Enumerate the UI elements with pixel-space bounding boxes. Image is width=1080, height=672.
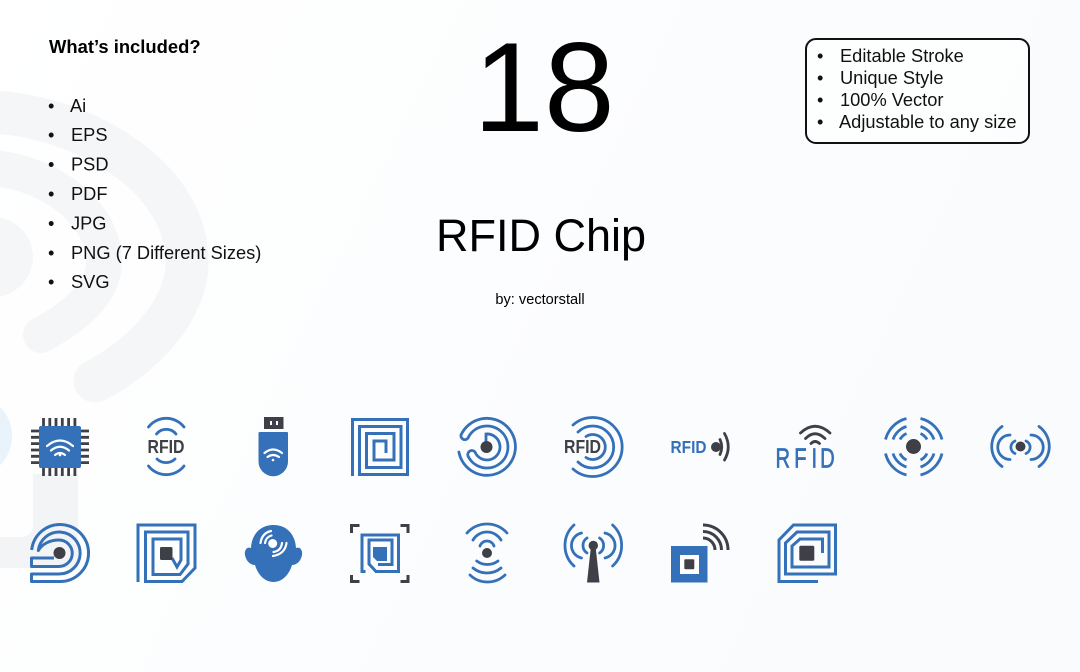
author: by: vectorstall xyxy=(495,292,585,308)
icon: target with four quadrant arcs xyxy=(886,418,942,475)
icon: RFID in circle coil xyxy=(564,417,622,476)
icon: RFID with dot signal xyxy=(670,434,728,460)
list: file formats: PDF xyxy=(71,183,108,204)
panel: features xyxy=(806,39,1029,143)
list: file formats: • xyxy=(48,183,54,204)
icon: RFID with signal: RFID xyxy=(148,436,184,457)
list: file formats: JPG xyxy=(71,212,106,234)
title: RFID Chip xyxy=(436,210,646,261)
panel: features: • xyxy=(817,67,823,88)
panel: features: 100% Vector xyxy=(840,89,944,110)
icon: antenna tower xyxy=(565,525,622,582)
heading: what's included: What’s included? xyxy=(49,36,201,57)
icon: wifi chip xyxy=(31,418,89,476)
icon: RFID with dot signal: RFID xyxy=(670,437,706,457)
panel: features: • xyxy=(817,89,823,110)
icon: tag with chamfered corner xyxy=(779,525,836,582)
list: file formats: EPS xyxy=(71,124,108,145)
icon count: 18 xyxy=(473,16,615,158)
panel: features: Unique Style xyxy=(840,67,943,88)
list: file formats: Ai xyxy=(70,95,86,116)
icon: square coil xyxy=(352,420,408,476)
panel: features: • xyxy=(817,45,823,66)
list: file formats: • xyxy=(48,154,54,174)
list: file formats: • xyxy=(48,242,54,263)
list: file formats xyxy=(48,95,261,292)
list: file formats: • xyxy=(48,212,54,234)
icon: RFID under wifi xyxy=(776,426,835,474)
icon: USB stick xyxy=(258,417,288,476)
list: file formats: • xyxy=(48,124,54,145)
panel: features: Adjustable to any size xyxy=(839,111,1017,132)
icon: RFID under wifi: RFID xyxy=(776,443,835,474)
icon: scanned coil xyxy=(352,526,408,582)
list: file formats: • xyxy=(48,271,54,292)
list: file formats: SVG xyxy=(71,271,110,292)
icon: dot with waves above and below xyxy=(467,524,507,582)
panel: features: • xyxy=(817,111,823,132)
icon: RFID with signal xyxy=(148,418,184,475)
icon: broadcast dot xyxy=(992,426,1049,466)
icon: square tag with signal xyxy=(671,525,728,582)
icon: head with signal xyxy=(245,525,302,582)
icon: circular spiral coil xyxy=(459,418,515,475)
icon: RFID in circle coil: RFID xyxy=(564,436,601,457)
list: file formats: PNG (7 Different Sizes) xyxy=(71,242,261,263)
icon: tag with cut corner xyxy=(138,525,195,582)
panel: features: Editable Stroke xyxy=(840,45,964,66)
background watermark xyxy=(0,112,187,568)
icon: concentric tag xyxy=(32,525,89,582)
list: file formats: PSD xyxy=(71,154,109,174)
list: file formats: • xyxy=(48,95,54,116)
